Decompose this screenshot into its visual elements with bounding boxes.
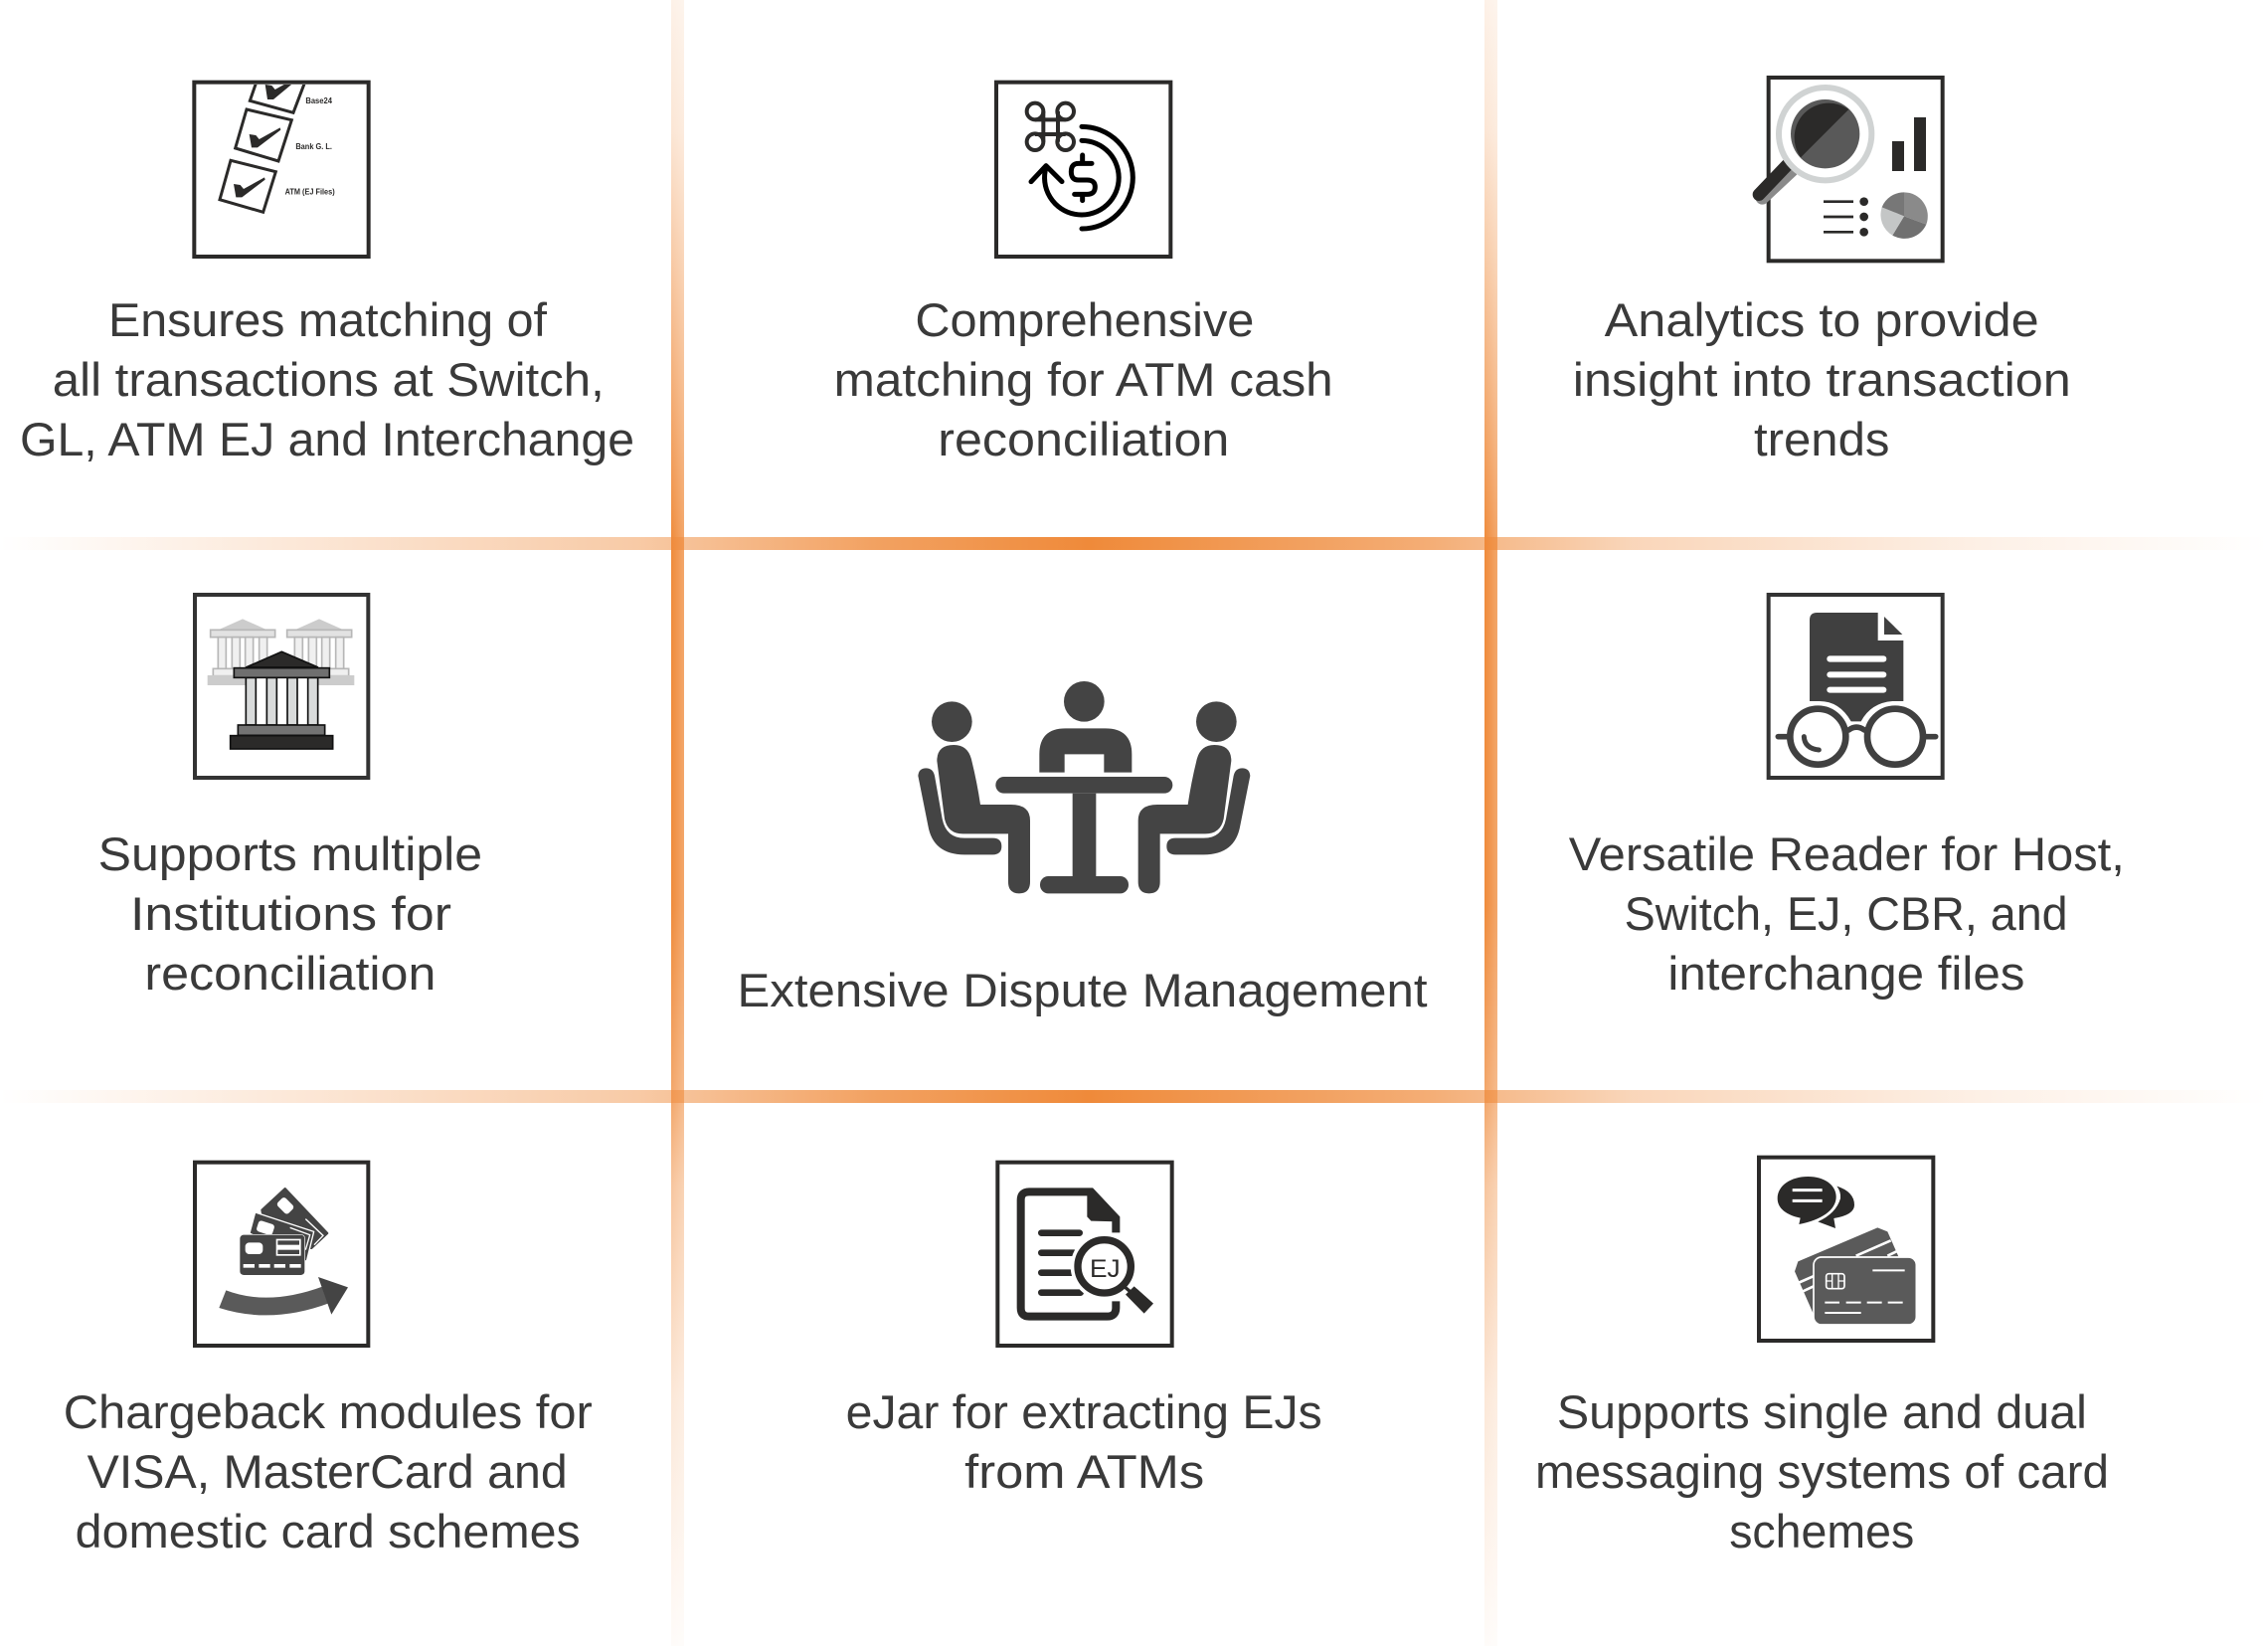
text: matching description: all transactions at Switch, (53, 353, 605, 406)
text: analytics description: trends (1754, 413, 1889, 465)
horizontal divider: upper (0, 537, 2268, 550)
vertical divider: right (1484, 0, 1497, 1646)
icon: checklist: Base24 (305, 95, 332, 105)
text: messaging description: Supports single and dual (1557, 1385, 2087, 1438)
text: matching description: GL, ATM EJ and Interchange (20, 413, 634, 465)
text: messaging description: messaging systems of card (1535, 1445, 2109, 1498)
vertical divider: left (671, 0, 684, 1646)
text: cash reconciliation description: Comprehensive (915, 293, 1254, 346)
text: reader description: Switch, EJ, CBR, and (1625, 887, 2068, 940)
panel: eJar (846, 1163, 1322, 1498)
text: institutions description: reconciliation (144, 947, 436, 1000)
panel: chargeback modules (64, 1163, 593, 1557)
panel: versatile reader (1569, 595, 2125, 1000)
icon: chat bubbles and cards (1759, 1158, 1933, 1341)
text: matching description: Ensures matching of (108, 293, 548, 346)
text: chargeback description: Chargeback modules for (64, 1385, 593, 1438)
icon: EJ document search: EJ (1090, 1255, 1121, 1283)
text: chargeback description: domestic card schemes (76, 1505, 581, 1557)
icon: command and dollar cycle (996, 83, 1170, 257)
text: eJar description: eJar for extracting EJs (846, 1385, 1322, 1438)
icon: document and glasses (1769, 595, 1943, 778)
icon: magnifier with charts (1759, 78, 1943, 261)
icon: checklist (194, 67, 369, 257)
text: analytics description: insight into transaction (1573, 353, 2071, 406)
text: cash reconciliation description (834, 293, 1333, 465)
text: cash reconciliation description: reconciliation (938, 413, 1229, 465)
text: matching description (20, 293, 634, 465)
text: institutions description: Institutions for (130, 887, 451, 940)
text: analytics description (1573, 293, 2071, 465)
text: eJar description: from ATMs (964, 1445, 1204, 1498)
text: reader description: Versatile Reader for Host, (1569, 827, 2125, 880)
text: chargeback description: VISA, MasterCard and (87, 1445, 568, 1498)
panel: dispute management (738, 681, 1428, 1016)
panel: ATM cash reconciliation (834, 83, 1333, 465)
icon: banks (195, 595, 368, 778)
text: messaging description: schemes (1729, 1505, 1914, 1557)
text: institutions description: Supports multiple (98, 827, 482, 880)
panel: messaging systems (1535, 1158, 2109, 1557)
text: reader description: interchange files (1667, 947, 2024, 1000)
text: institutions description (98, 827, 482, 1000)
icon: meeting at table (918, 681, 1250, 893)
horizontal divider: lower (0, 1090, 2268, 1103)
text: dispute management label: Extensive Dispute Management (738, 964, 1428, 1016)
panel: analytics (1573, 78, 2071, 465)
panel: multiple institutions (98, 595, 482, 1000)
icon: EJ document search (997, 1163, 1172, 1346)
panel: switch, GL, EJ matching (20, 67, 634, 465)
text: reader description (1569, 827, 2125, 1000)
icon: cards with arrow (195, 1163, 368, 1346)
icon: checklist: ATM (EJ Files) (285, 186, 335, 196)
text: analytics description: Analytics to provide (1605, 293, 2039, 346)
text: chargeback description (64, 1385, 593, 1557)
icon: checklist: Bank G. L. (295, 141, 332, 151)
text: cash reconciliation description: matching for ATM cash (834, 353, 1333, 406)
text: eJar description (846, 1385, 1322, 1498)
text: messaging description (1535, 1385, 2109, 1557)
